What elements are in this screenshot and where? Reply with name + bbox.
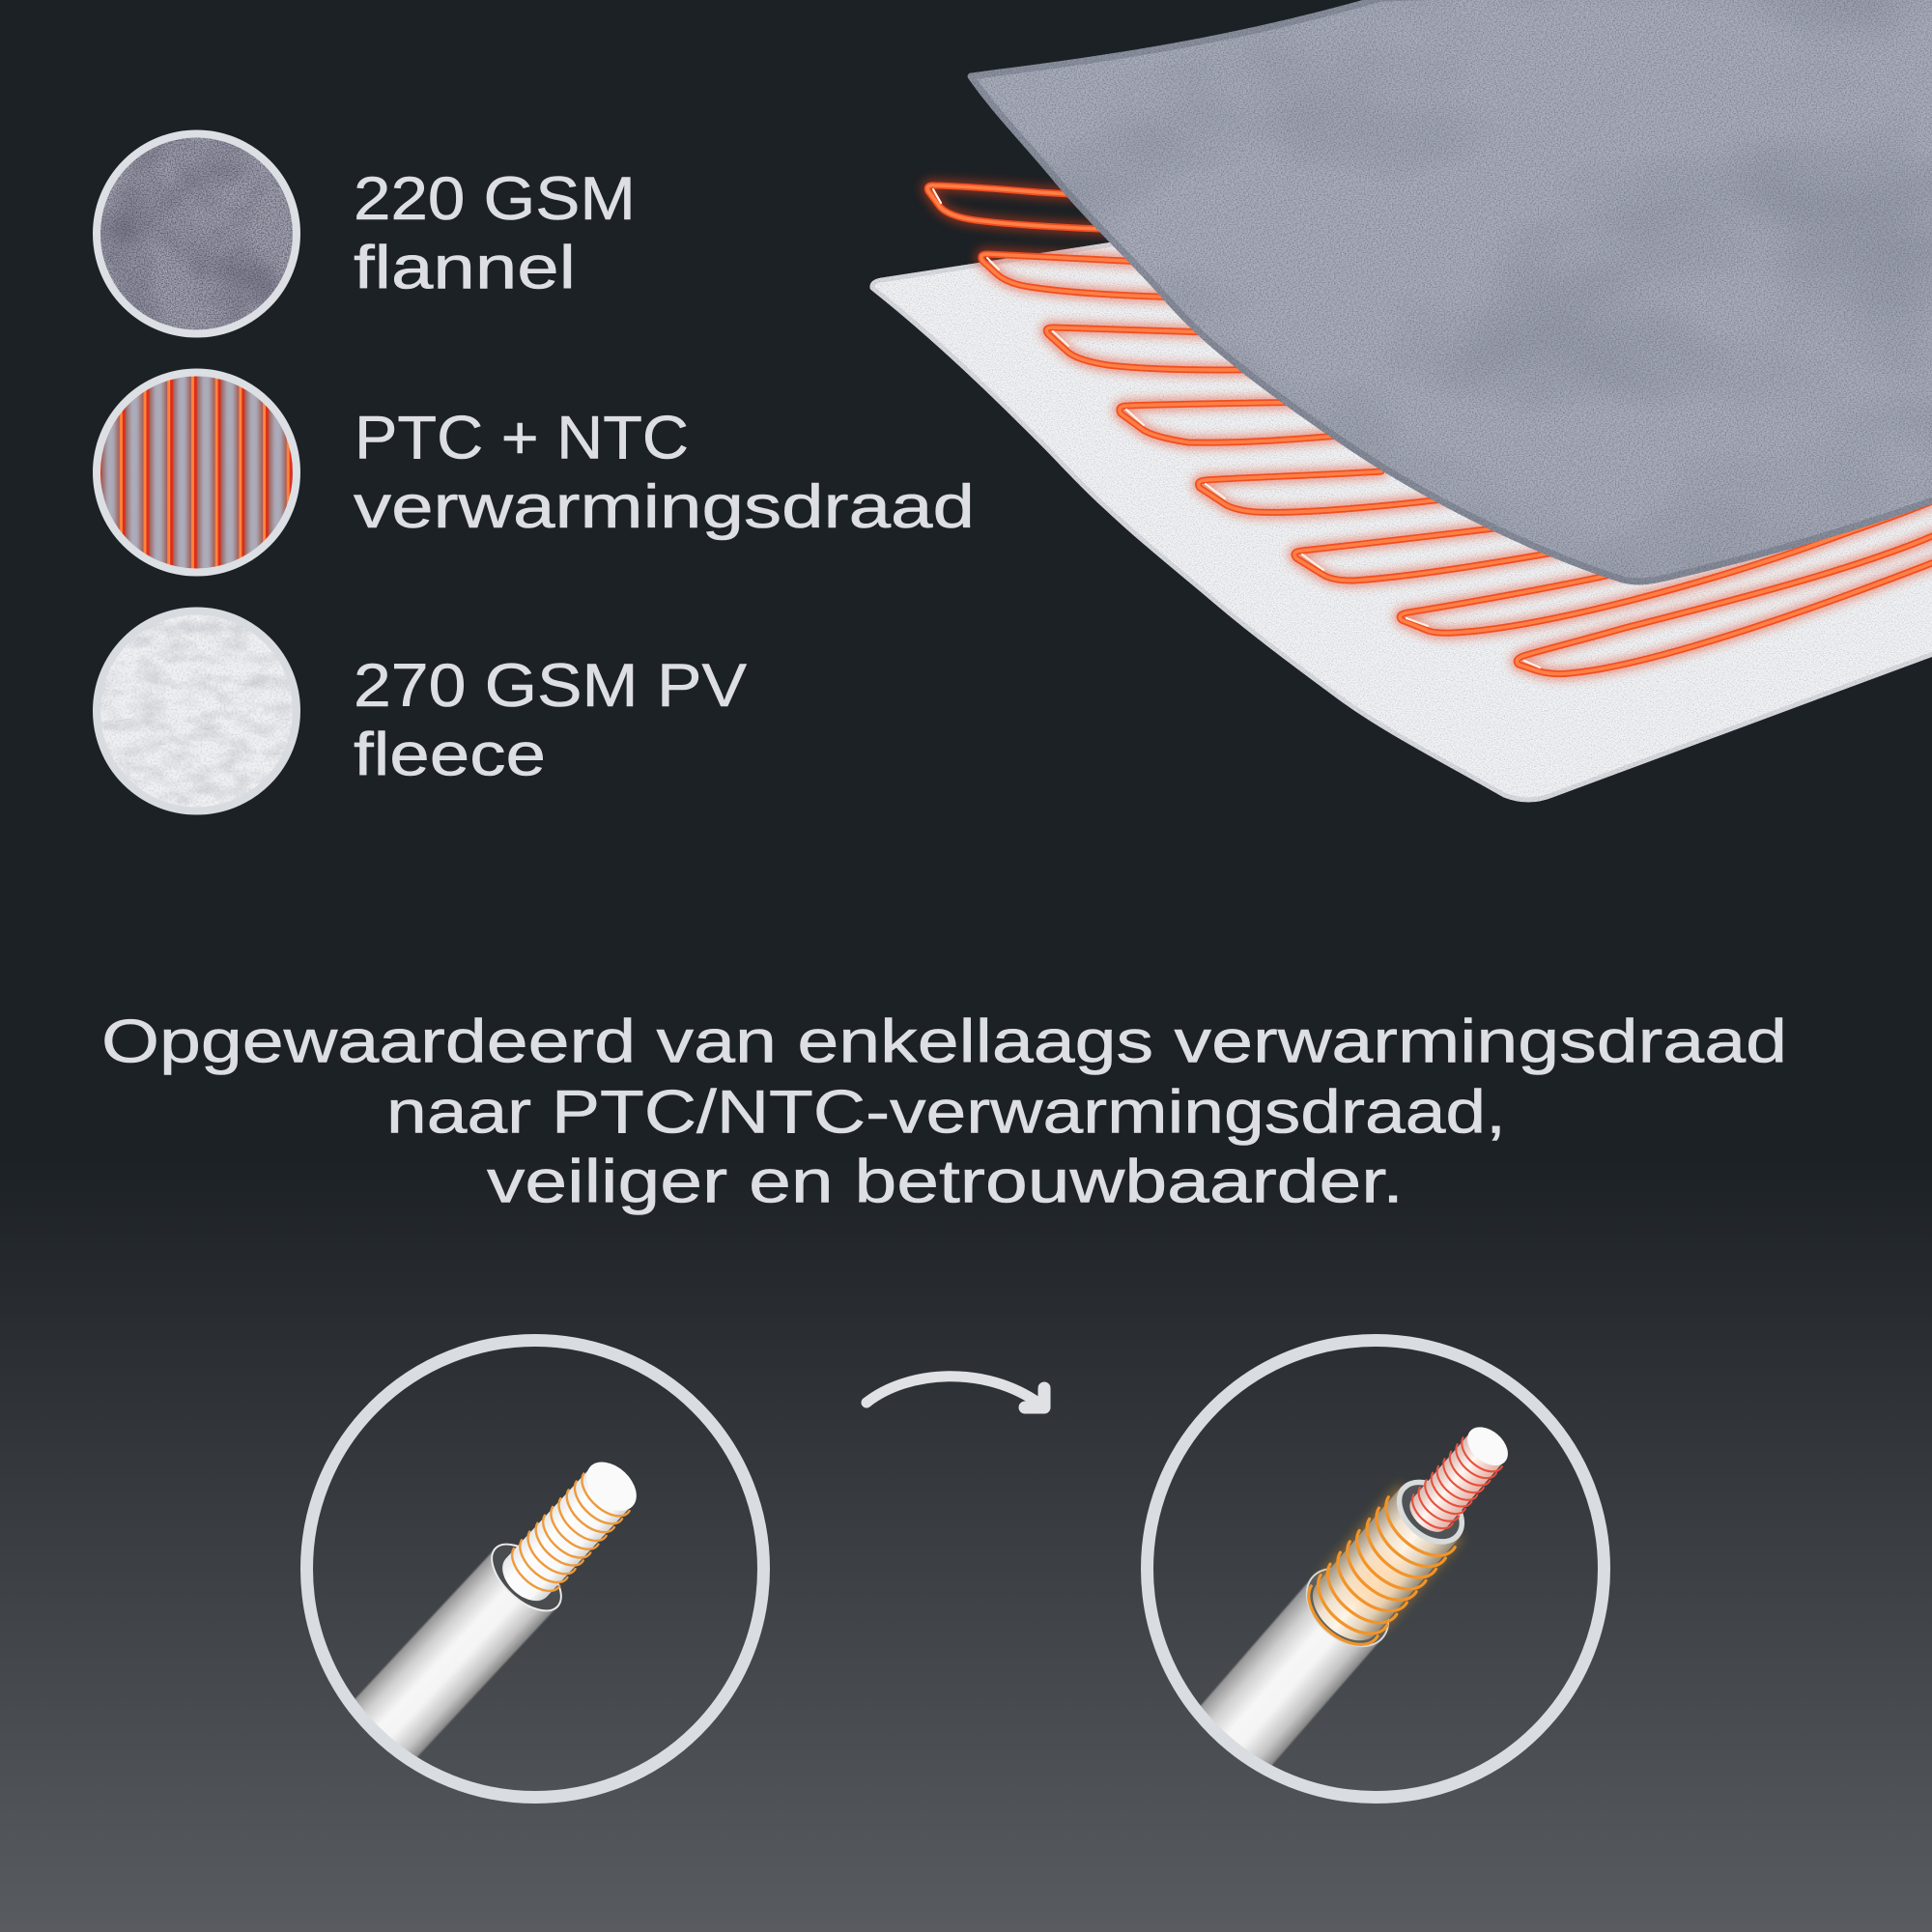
icon: flannel swatch (97, 133, 297, 334)
label: 220 GSM flannel (354, 165, 636, 301)
arrow: upgrade direction (867, 1377, 1044, 1407)
label: 220 GSM flannel: 220 GSM (354, 165, 636, 233)
icon: heating wire swatch (93, 369, 301, 578)
grey flannel layer (971, 0, 1932, 582)
heating wire loops (927, 185, 1932, 674)
icon: PTC/NTC dual-layer wire (1141, 1334, 1610, 1804)
heading: upgrade statement: veiliger en betrouwbaarder. (487, 1148, 1404, 1215)
label: PTC + NTC verwarmingsdraad (354, 404, 975, 541)
icon: fleece swatch (97, 611, 297, 811)
label: 270 GSM PV fleece: fleece (354, 721, 546, 788)
heading: upgrade statement (101, 1009, 1787, 1215)
icon: single-layer wire (298, 1341, 763, 1818)
label: 270 GSM PV fleece: 270 GSM PV (354, 652, 747, 720)
panel: material legend (93, 133, 975, 811)
heading: upgrade statement: naar PTC/NTC-verwarmingsdraad, (386, 1078, 1506, 1146)
illustration: layered heating blanket (872, 0, 1932, 800)
white fleece layer (872, 244, 1932, 800)
label: 270 GSM PV fleece (354, 652, 747, 788)
label: PTC + NTC verwarmingsdraad: PTC + NTC (355, 404, 689, 471)
label: PTC + NTC verwarmingsdraad: verwarmingsdraad (354, 473, 975, 541)
heading: upgrade statement: Opgewaardeerd van enkellaags verwarmingsdraad (101, 1009, 1787, 1076)
label: 220 GSM flannel: flannel (354, 234, 576, 301)
